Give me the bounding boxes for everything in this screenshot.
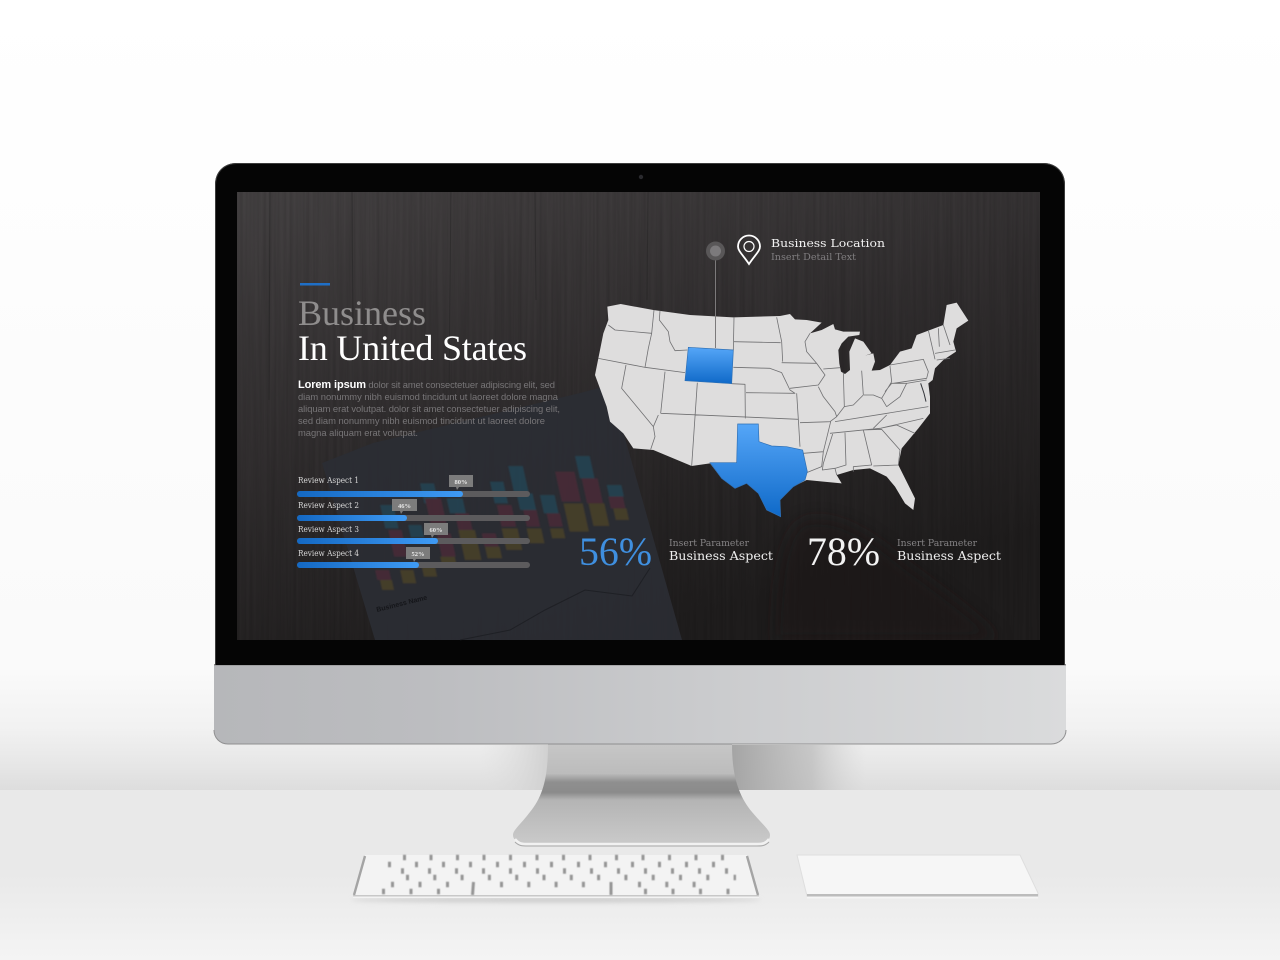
business location label: Business Location (771, 236, 886, 250)
photo line chart (460, 568, 650, 640)
stat 78%: Insert Parameter (897, 538, 977, 549)
review aspect 4: 52% (412, 551, 424, 558)
slide wood background (237, 192, 1040, 640)
desk surface (0, 790, 1280, 960)
review aspect 3 (297, 523, 530, 544)
body paragraph: aliquam erat volutpat. dolor sit amet consectetuer adipiscing elit, (298, 403, 560, 414)
review aspect 3: 60% (430, 527, 442, 534)
review aspect 1: 80% (454, 479, 468, 486)
title (298, 293, 527, 368)
stat 78%: Business Aspect (897, 549, 1001, 563)
title: In United States (298, 328, 527, 368)
review aspect 3: Review Aspect 3 (298, 525, 359, 535)
accent dash (300, 283, 330, 286)
stat 56% (579, 529, 773, 574)
background photo: hand (775, 519, 1000, 640)
monitor stand (513, 744, 770, 846)
review aspect 1 (297, 475, 530, 497)
review aspect 2: Review Aspect 2 (298, 501, 359, 511)
review aspect 4: Review Aspect 4 (298, 549, 359, 559)
map: state borders (598, 310, 955, 475)
business location label (771, 236, 886, 263)
stat 56%: Business Aspect (669, 549, 773, 563)
map: Chesapeake Bay (921, 383, 926, 402)
keyboard keys (382, 858, 736, 895)
monitor shadow on wall (510, 745, 848, 790)
pin line to Wyoming (706, 242, 725, 348)
state: Wyoming highlighted (685, 347, 733, 384)
body paragraph: Lorem ipsum dolor sit amet consectetuer adipiscing elit, sed (298, 379, 555, 391)
stat 56%: 56% (579, 529, 652, 574)
review progress bars (297, 475, 530, 568)
body paragraph: diam nonummy nibh euismod tincidunt ut laoreet dolore magna (298, 391, 559, 402)
state: Texas highlighted (710, 424, 807, 517)
business location label: Insert Detail Text (771, 252, 856, 263)
review aspect 2: 46% (398, 503, 411, 510)
monitor bezel (215, 163, 1065, 665)
icon: location pin (738, 236, 760, 264)
US map (595, 303, 968, 517)
monitor chin (214, 664, 1066, 744)
review aspect 4 (297, 547, 530, 568)
wireless keyboard (351, 855, 761, 902)
body paragraph: magna aliquam erat volutpat. (298, 427, 418, 438)
photo caption: Business Name (376, 595, 428, 614)
map: country outline (595, 303, 968, 517)
body paragraph: sed diam nonummy nibh euismod tincidunt ut laoreet dolore (298, 415, 545, 426)
review aspect 2 (297, 499, 530, 521)
background photo: report paper with bar chart (322, 385, 682, 640)
title: Business (298, 293, 426, 333)
photo chart bars (350, 456, 644, 590)
slide screen (237, 192, 1040, 640)
desktop monitor (214, 163, 1066, 846)
stat 78%: 78% (807, 529, 880, 574)
body paragraph (298, 379, 560, 438)
stat 78% (807, 529, 1001, 574)
stat 56%: Insert Parameter (669, 538, 749, 549)
trackpad (797, 855, 1038, 898)
review aspect 1: Review Aspect 1 (298, 476, 359, 486)
